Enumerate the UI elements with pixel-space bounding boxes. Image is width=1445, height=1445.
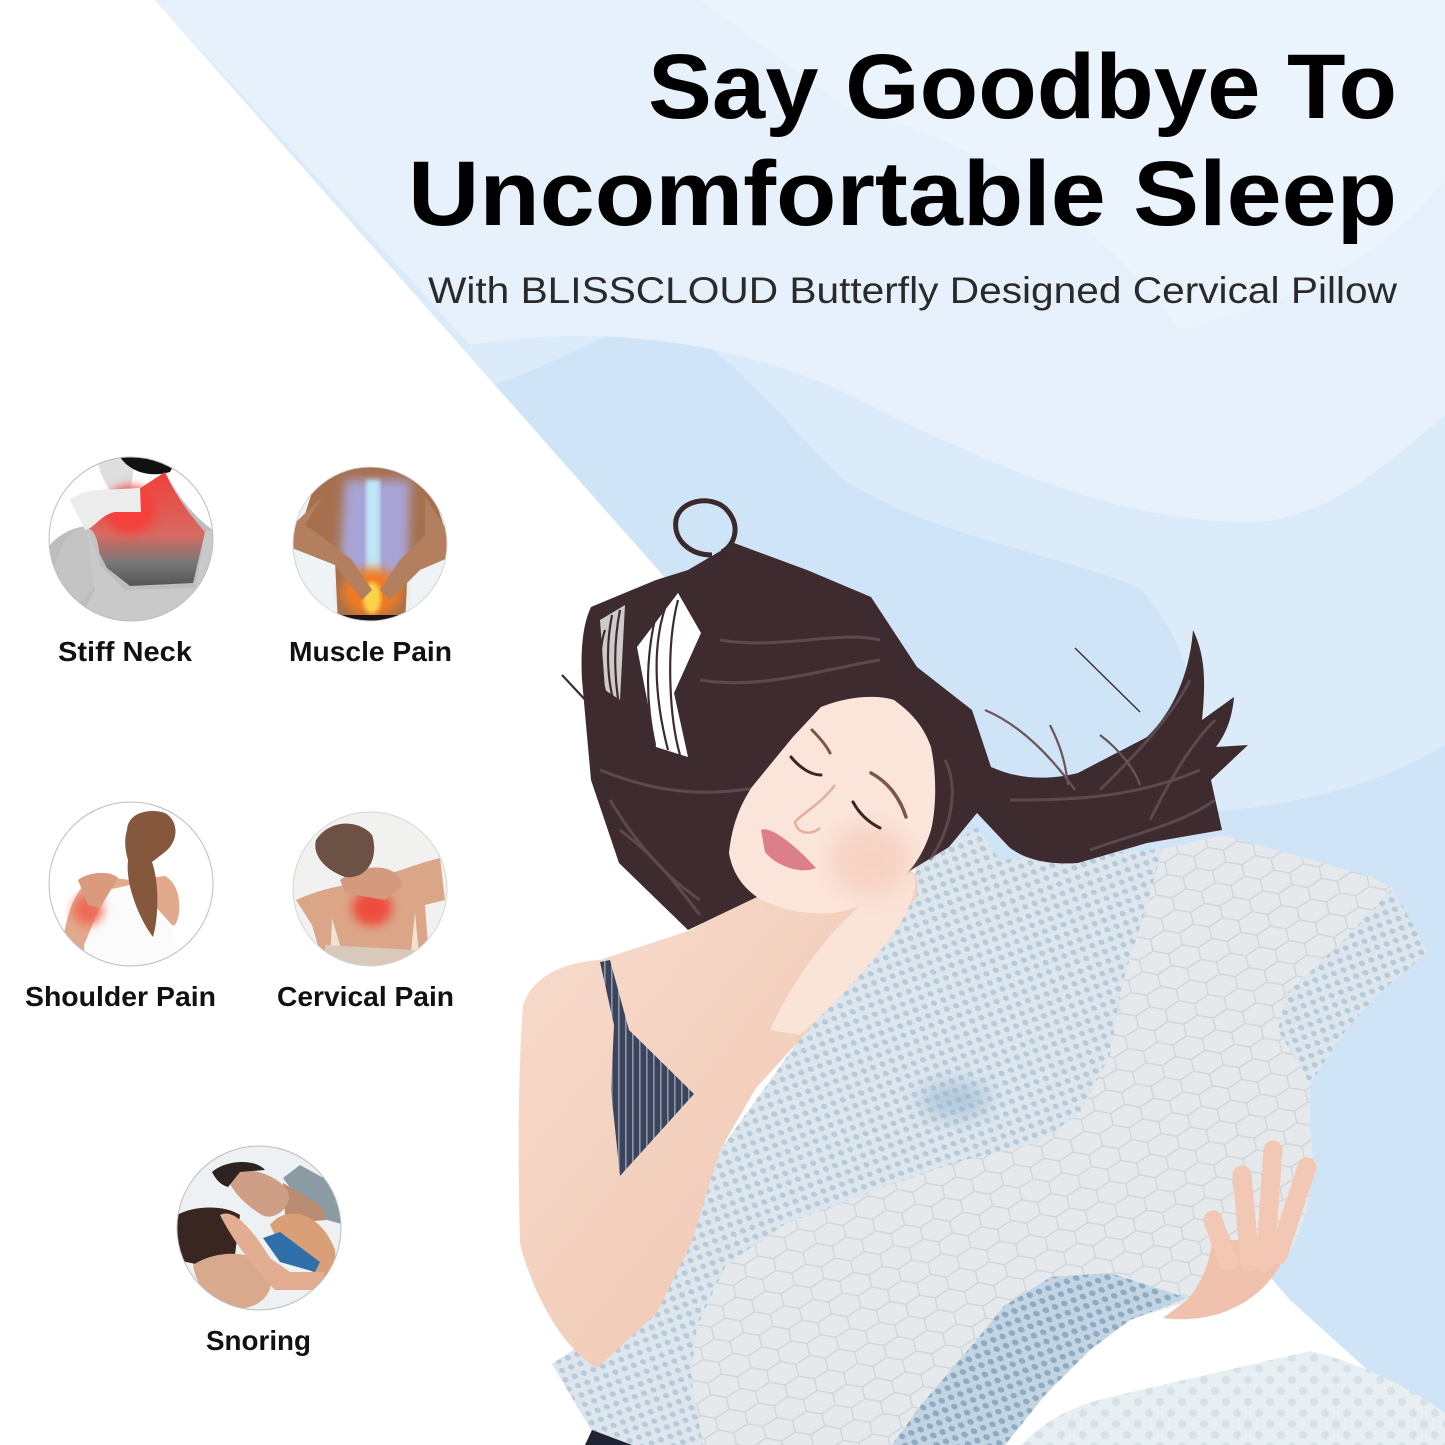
hair gap left — [637, 593, 701, 757]
icon: stiff neck — [48, 456, 214, 622]
label: stiff neck: Stiff Neck — [58, 636, 192, 667]
pillow mesh right side — [1278, 888, 1428, 1084]
lips — [761, 829, 816, 870]
hair curl — [676, 501, 735, 555]
face — [729, 697, 935, 914]
dress strap and top — [600, 960, 694, 1176]
subtitle: With BLISSCLOUD Butterfly Designed Cervical Pillow — [428, 270, 1397, 311]
title — [408, 36, 1397, 245]
body and arm — [519, 871, 918, 1368]
hair strands — [562, 595, 1140, 790]
icon: muscle pain — [292, 467, 448, 625]
label: cervical pain: Cervical Pain — [277, 981, 454, 1012]
hair — [562, 501, 1248, 930]
right hand — [1163, 1150, 1307, 1319]
icon: snoring — [177, 1146, 345, 1310]
hand highlight — [770, 873, 915, 1035]
lower dress — [585, 1430, 632, 1445]
pillow mesh centre — [552, 827, 1163, 1445]
label: snoring: Snoring — [206, 1325, 311, 1356]
label: shoulder pain: Shoulder Pain — [25, 981, 216, 1012]
pillow mesh bottom — [892, 1273, 1187, 1445]
eyes and eyebrows — [791, 730, 906, 828]
nose — [795, 785, 835, 833]
pillow — [552, 827, 1428, 1445]
title: Uncomfortable Sleep — [408, 143, 1397, 245]
label: muscle pain: Muscle Pain — [289, 636, 452, 667]
woman and pillow photo — [519, 501, 1428, 1445]
pillow dimple shadow — [920, 1082, 990, 1118]
icon: shoulder pain — [49, 802, 213, 975]
title: Say Goodbye To — [648, 36, 1397, 138]
second pillow bottom right — [1021, 1351, 1445, 1445]
icon: cervical pain — [293, 812, 447, 970]
